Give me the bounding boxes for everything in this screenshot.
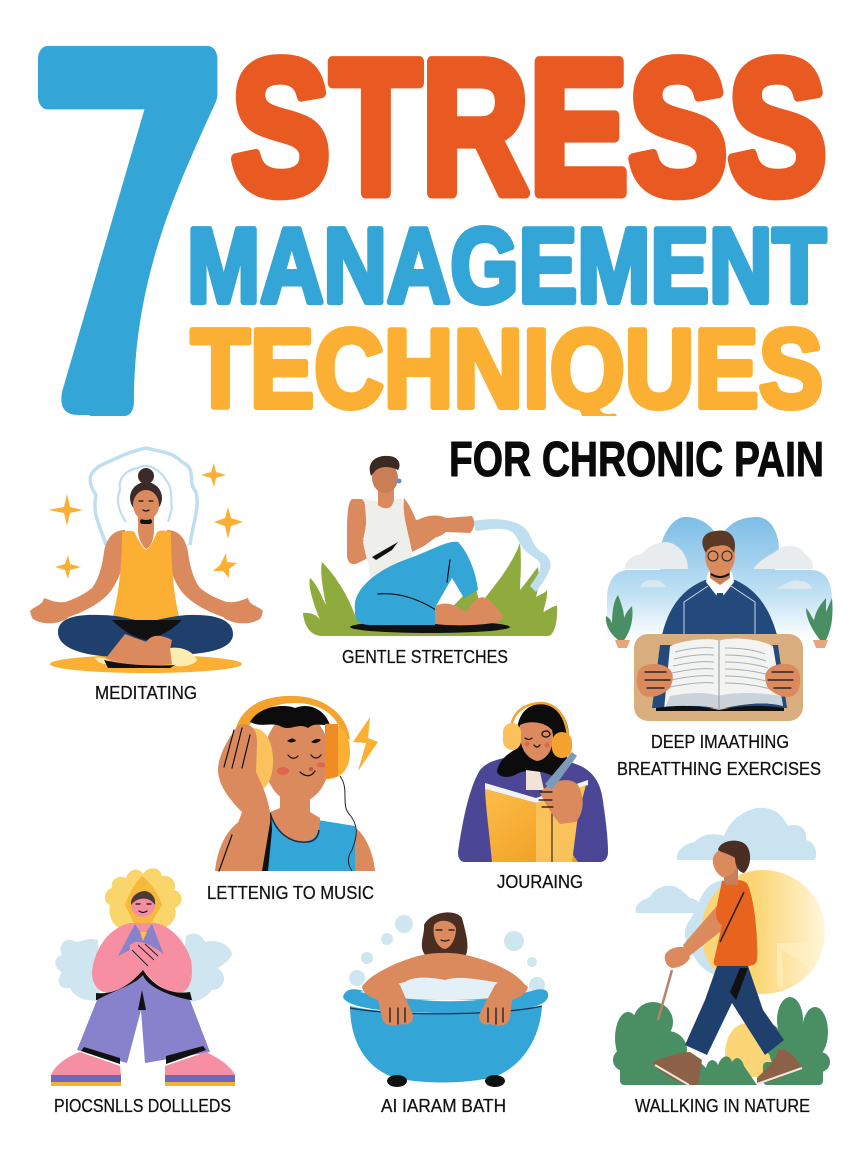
plants [606,595,833,648]
pants [77,975,210,1063]
label: WALLKING IN NATURE [635,1096,810,1116]
shirt [260,812,355,871]
panel: walking in nature [613,808,830,1116]
left ear cup [251,728,273,792]
label: GENTLE STRETCHES [342,647,508,667]
panel: deep breathing [606,517,833,779]
mat [50,655,242,673]
bushes [613,997,830,1085]
head [702,530,735,585]
panel: warm bath [343,912,548,1116]
hands [30,598,263,623]
hands [637,664,673,697]
hands [412,516,474,539]
sweater [662,580,777,635]
tub bowl [350,1006,542,1082]
head [370,456,402,508]
foam [360,978,535,1000]
icon: aura waves [90,448,197,545]
label [617,732,821,779]
label: AI IARAM BATH [381,1096,506,1116]
pen [545,752,577,790]
right ear cup [325,724,350,779]
hair [497,704,569,778]
clouds [636,808,816,977]
bubbles [349,915,545,993]
shoulders [215,815,375,871]
label: LETTENIG TO MUSIC [207,883,374,903]
left arm [347,499,404,564]
label: MEDITATING [95,683,197,703]
facial features [277,738,326,776]
pants [685,966,784,1055]
headphone band [234,696,350,740]
label: DEEP IMAATHING [651,732,789,752]
head [131,891,155,917]
half sun [725,1023,772,1077]
right shoe [757,1049,802,1084]
grass [303,543,557,636]
panel: gentle stretches [303,456,557,667]
left shoe [652,1052,702,1085]
title [38,46,828,477]
golden hair [105,868,182,928]
stick [658,970,672,1020]
collar and tie [706,572,734,600]
face [264,713,330,803]
label: BREATTHING EXERCISES [617,759,821,779]
icon: sparkles [48,463,243,579]
head [434,921,456,949]
clouds [625,542,813,589]
waist shadow [96,970,192,1000]
panel: meditating [30,448,263,703]
sky background [607,517,832,640]
label: JOURAING [497,872,583,892]
torso [112,530,180,620]
icon: sound bolt [353,717,378,771]
book [485,780,588,862]
right arm [404,498,446,552]
jacket [458,755,608,862]
shirt [714,880,757,966]
panel: journaling [458,703,608,892]
tub feet [387,1075,505,1087]
hair [250,706,330,728]
shirt [526,770,544,790]
legs [355,542,478,625]
crossed shins [106,634,178,665]
hands [130,942,173,980]
label: PIOCSNLLS DOLLLEDS [54,1096,231,1116]
face [520,722,553,761]
panel: progressive muscle [51,868,235,1116]
shoulders [362,953,528,1000]
hand and arm [218,724,270,871]
neck and chest [270,790,320,842]
water stream [472,519,551,592]
shirt [363,498,414,590]
headphones [503,703,572,758]
head [130,468,162,520]
tub rim [343,989,548,1013]
torso [92,923,192,993]
hand [665,947,690,968]
legs [58,615,233,657]
hair [422,912,467,957]
head [713,841,750,885]
foot [435,597,502,625]
neck [138,516,154,549]
wings [55,934,232,1002]
cord [340,776,356,871]
forearms and hands [362,979,413,1026]
dark arm shadow [372,542,398,560]
arm [683,900,735,958]
shadow [350,621,510,633]
panel: listening to music [207,696,378,903]
sun rays [777,943,823,987]
table [634,634,803,721]
sun [701,870,825,994]
inner shirt [118,924,165,970]
feet [51,1046,235,1086]
hand [540,780,583,824]
arms [62,530,230,618]
book [652,639,787,711]
